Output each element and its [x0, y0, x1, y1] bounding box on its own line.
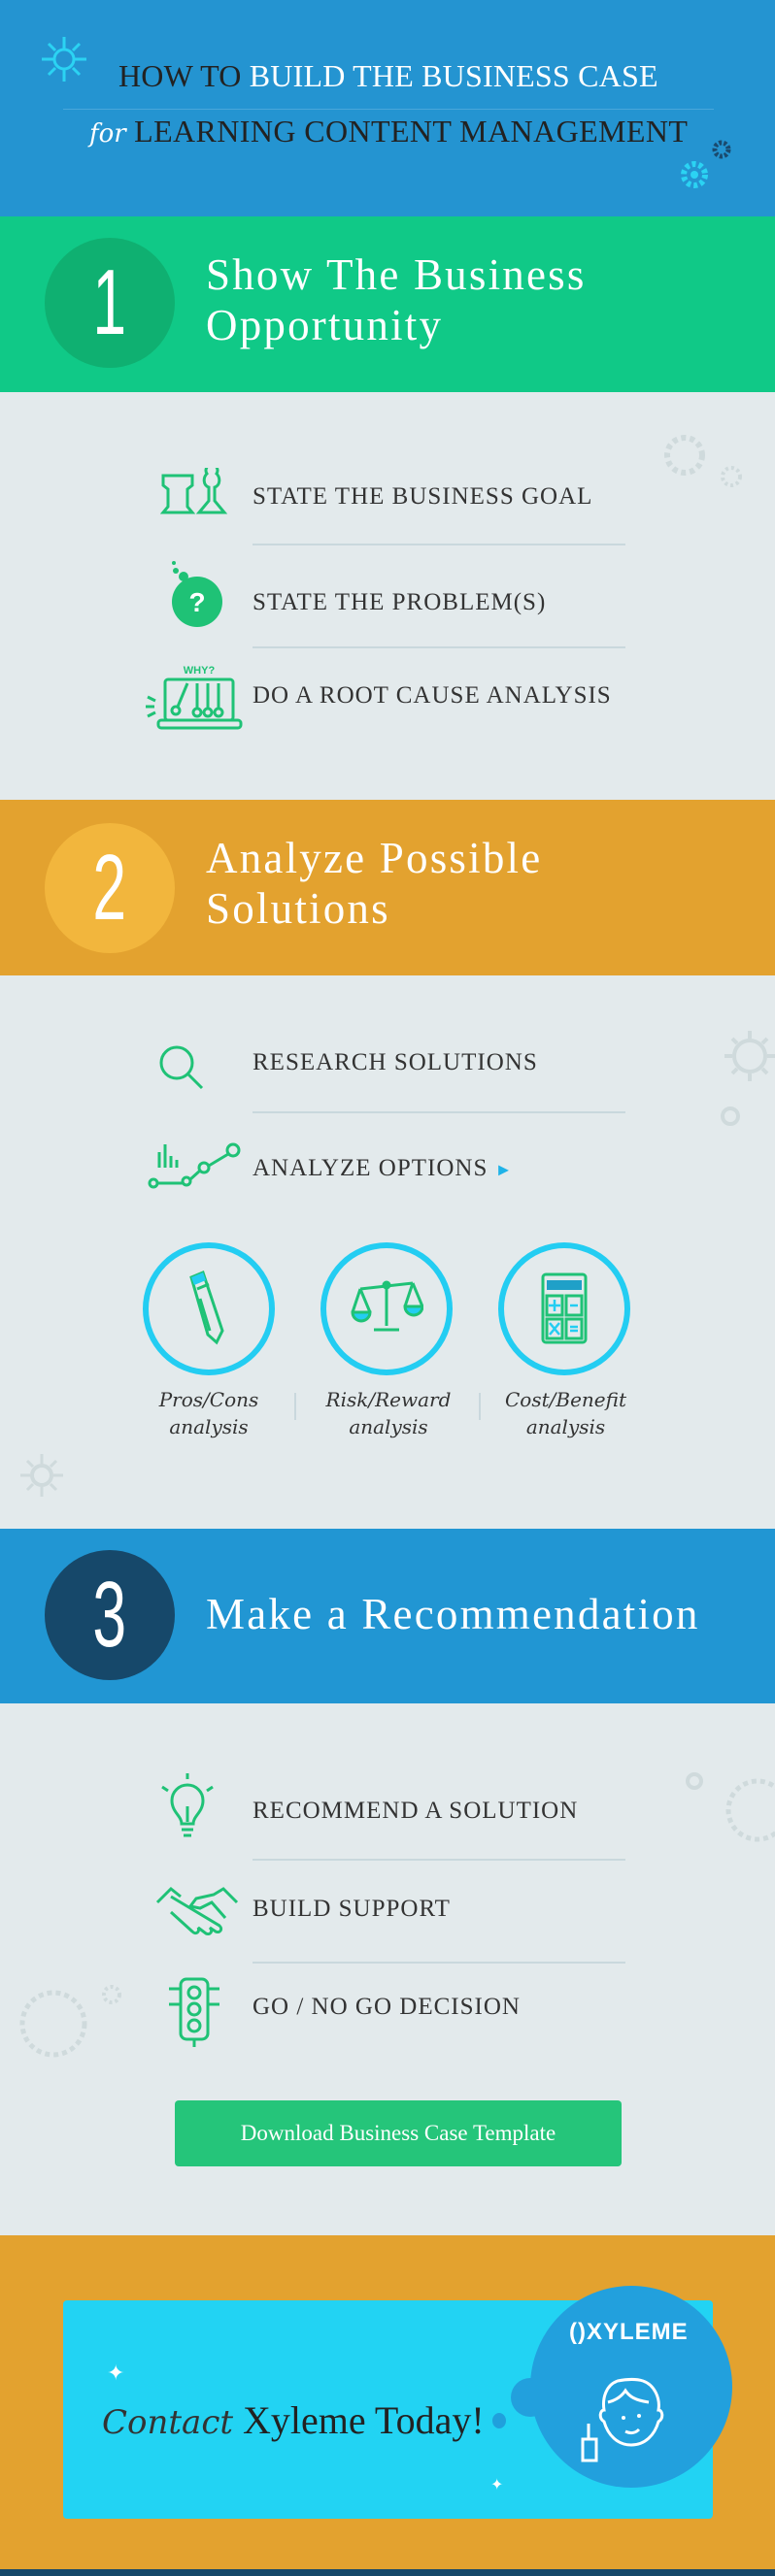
option circles: Cost/Benefit [505, 1388, 626, 1411]
contact card: ✦ [490, 2477, 503, 2493]
item: root cause: DO A ROOT CAUSE ANALYSIS [253, 682, 612, 709]
logo circle: ()XYLEME [569, 2319, 689, 2345]
item: root cause: WHY? [184, 665, 215, 677]
option circles: analysis [169, 1415, 249, 1438]
section 3 header: Make a Recommendation [206, 1590, 700, 1638]
section 3 header: 3 [93, 1563, 126, 1667]
footer strip [0, 2569, 775, 2576]
item: problems: STATE THE PROBLEM(S) [253, 589, 546, 615]
circle: risk/reward [320, 1242, 453, 1375]
section 3 body [19, 1772, 775, 2166]
circle: pros/cons [143, 1242, 275, 1375]
item: build support: BUILD SUPPORT [253, 1896, 451, 1922]
contact card: ✦ [107, 2361, 124, 2385]
item: problems: ? [188, 587, 206, 617]
item: recommend: RECOMMEND A SOLUTION [253, 1798, 578, 1824]
section 1 header [0, 216, 775, 392]
circle: cost/benefit [498, 1242, 630, 1375]
item: research [159, 1046, 538, 1089]
item: go/no go [169, 1978, 521, 2047]
item: go/no go: GO / NO GO DECISION [253, 1994, 521, 2020]
item: build support [156, 1887, 451, 1935]
item: recommend [161, 1773, 578, 1836]
contact band [0, 2235, 775, 2570]
section 1 header: 1 [93, 250, 126, 354]
section 2 body [20, 1031, 775, 1497]
option circles: analysis [526, 1415, 605, 1438]
section 2 header: Analyze Possible [206, 834, 542, 882]
header band [0, 0, 775, 216]
item: root cause [146, 665, 612, 730]
section 2 header: 2 [93, 836, 126, 940]
section 2 header: Solutions [206, 884, 390, 933]
section 3 header [0, 1529, 775, 1703]
item: analyze [148, 1143, 513, 1188]
button: download template: Download Business Case Template [241, 2121, 556, 2145]
contact card [63, 2300, 713, 2519]
section 1 header: Show The Business [206, 250, 587, 299]
option circles: Risk/Reward [326, 1388, 451, 1411]
option circles: analysis [349, 1415, 428, 1438]
option circles: Pros/Cons [159, 1388, 258, 1411]
section 1 header: Opportunity [206, 301, 443, 349]
title line 2: for LEARNING CONTENT MANAGEMENT [89, 114, 688, 149]
option circles [143, 1242, 630, 1438]
icon: gears [681, 140, 730, 188]
item: business goal: STATE THE BUSINESS GOAL [253, 483, 592, 510]
item: analyze: ANALYZE OPTIONS ► [253, 1155, 513, 1181]
section 1 body [146, 435, 742, 730]
item: business goal [160, 468, 592, 514]
title line 1: HOW TO BUILD THE BUSINESS CASE [118, 58, 658, 93]
button: download template [175, 2100, 622, 2166]
section 2 header [0, 800, 775, 975]
item: research: RESEARCH SOLUTIONS [253, 1049, 538, 1075]
logo circle [530, 2286, 732, 2488]
contact text: Contact Xyleme Today! [102, 2398, 485, 2442]
icon: sun [42, 37, 86, 82]
item: problems [172, 561, 546, 627]
